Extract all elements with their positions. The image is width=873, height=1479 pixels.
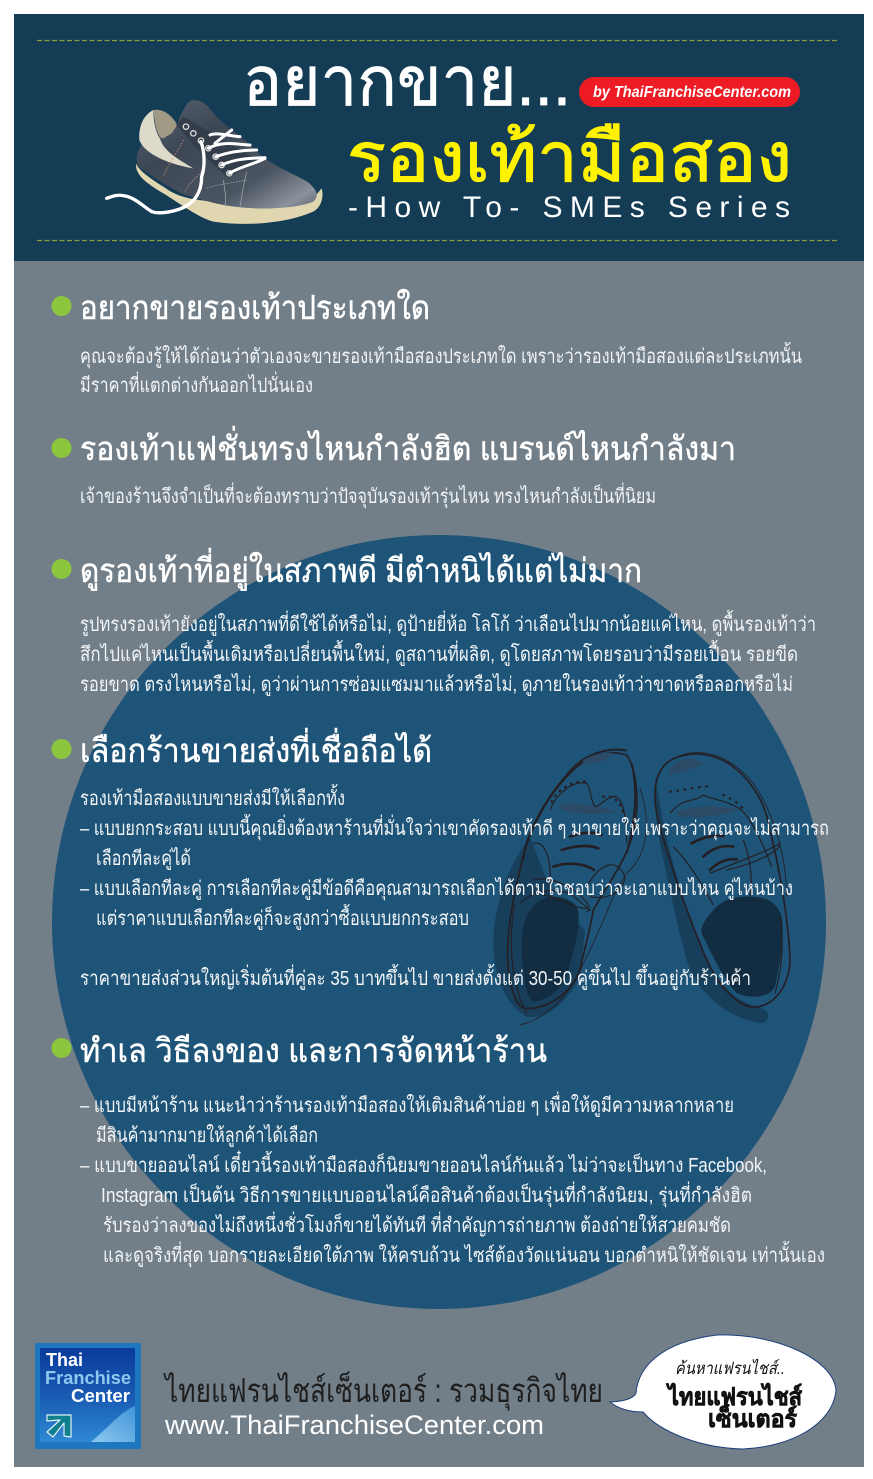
logo: Thai Franchise Center: Center	[71, 1386, 130, 1406]
bullet 5	[52, 1038, 72, 1058]
section 2	[52, 426, 736, 509]
title: line two: รองเท้ามือสอง	[347, 120, 792, 196]
heading 3: ดูรองเท้าที่อยู่ในสภาพดี มีตำหนิได้แต่ไม่มาก	[80, 548, 642, 591]
panel: header band	[14, 14, 864, 261]
callout: speech bubble: ไทยแฟรนไชส์	[665, 1382, 802, 1411]
title: line one: อยากขาย...	[243, 44, 571, 120]
body 5: – แบบขายออนไลน์ เดี๋ยวนี้รองเท้ามือสองก็นิยมขายออนไลน์กันแล้ว ไม่ว่าจะเป็นทาง Facebook,	[80, 1150, 767, 1177]
illustration: pair of dress shoes	[493, 750, 790, 1025]
footer: website address: www.ThaiFranchiseCenter.com	[164, 1410, 544, 1440]
badge: by ThaiFranchiseCenter.com	[579, 77, 800, 107]
body 4: แต่ราคาแบบเลือกทีละคู่ก็จะสูงกว่าซื้อแบบยกกระสอบ	[96, 904, 469, 931]
body 5: มีสินค้ามากมายให้ลูกค้าได้เลือก	[96, 1124, 318, 1148]
callout: speech bubble: เซ็นเตอร์	[708, 1404, 797, 1433]
bullet 3	[52, 559, 72, 579]
body 5: Instagram เป็นต้น วิธีการขายแบบออนไลน์คือสินค้าต้องเป็นรุ่นที่กำลังนิยม, รุ่นที่กำลังฮิต	[101, 1181, 752, 1208]
body 5	[80, 1091, 825, 1268]
body 4: ราคาขายส่งส่วนใหญ่เริ่มต้นที่คู่ละ 35 บาทขึ้นไป ขายส่งตั้งแต่ 30-50 คู่ขึ้นไป ขึ้นอยู่กับร้านค้า	[80, 964, 751, 991]
panel: large blue circle	[52, 535, 826, 1309]
body 2: เจ้าของร้านจึงจำเป็นที่จะต้องทราบว่าปัจจุบันรองเท้ารุ่นไหน ทรงไหนกำลังเป็นที่นิยม	[80, 482, 656, 509]
badge: by ThaiFranchiseCenter.com: by ThaiFranchiseCenter.com	[593, 84, 791, 101]
body 1	[80, 342, 802, 397]
callout: speech bubble: ค้นหาแฟรนไชส์..	[675, 1358, 785, 1378]
logo: Thai Franchise Center	[35, 1343, 141, 1449]
icon: grey sneaker	[107, 100, 322, 224]
body 3	[80, 610, 816, 697]
icon: logo arrow	[47, 1415, 71, 1437]
footer: Thai tagline: ไทยแฟรนไชส์เซ็นเตอร์ : รวมธุรกิจไทย	[163, 1371, 603, 1411]
section 4	[52, 728, 829, 991]
section 3	[52, 548, 816, 697]
body 5: – แบบมีหน้าร้าน แนะนำว่าร้านรองเท้ามือสองให้เติมสินค้าบ่อย ๆ เพื่อให้ดูมีความหลากหลาย	[80, 1091, 734, 1118]
body 4: เลือกทีละคู่ได้	[96, 847, 191, 871]
logo: Thai Franchise Center: Franchise	[45, 1368, 131, 1388]
body 4: รองเท้ามือสองแบบขายส่งมีให้เลือกทั้ง	[80, 784, 345, 810]
bullet 2	[52, 438, 72, 458]
heading 4: เลือกร้านขายส่งที่เชื่อถือได้	[80, 728, 432, 769]
body 1: มีราคาที่แตกต่างกันออกไปนั่นเอง	[80, 371, 313, 397]
logo: Thai Franchise Center: Thai	[46, 1350, 83, 1370]
callout: speech bubble	[610, 1335, 836, 1449]
bullet 1	[52, 296, 72, 316]
body 5: รับรองว่าลงของไม่ถึงหนึ่งชั่วโมงก็ขายได้ทันที ที่สำคัญการถ่ายภาพ ต้องถ่ายให้สวยคมชัด	[103, 1211, 731, 1237]
section 5	[52, 1032, 825, 1268]
heading 1: อยากขายรองเท้าประเภทใด	[80, 289, 430, 326]
subtitle: -How To- SMEs Series	[348, 191, 790, 224]
body 4	[80, 784, 829, 991]
bullet 4	[52, 739, 72, 759]
heading 2: รองเท้าแฟชั่นทรงไหนกำลังฮิต แบรนด์ไหนกำลังมา	[80, 426, 736, 467]
section 1	[52, 289, 802, 397]
heading 5: ทำเล วิธีลงของ และการจัดหน้าร้าน	[80, 1032, 547, 1069]
